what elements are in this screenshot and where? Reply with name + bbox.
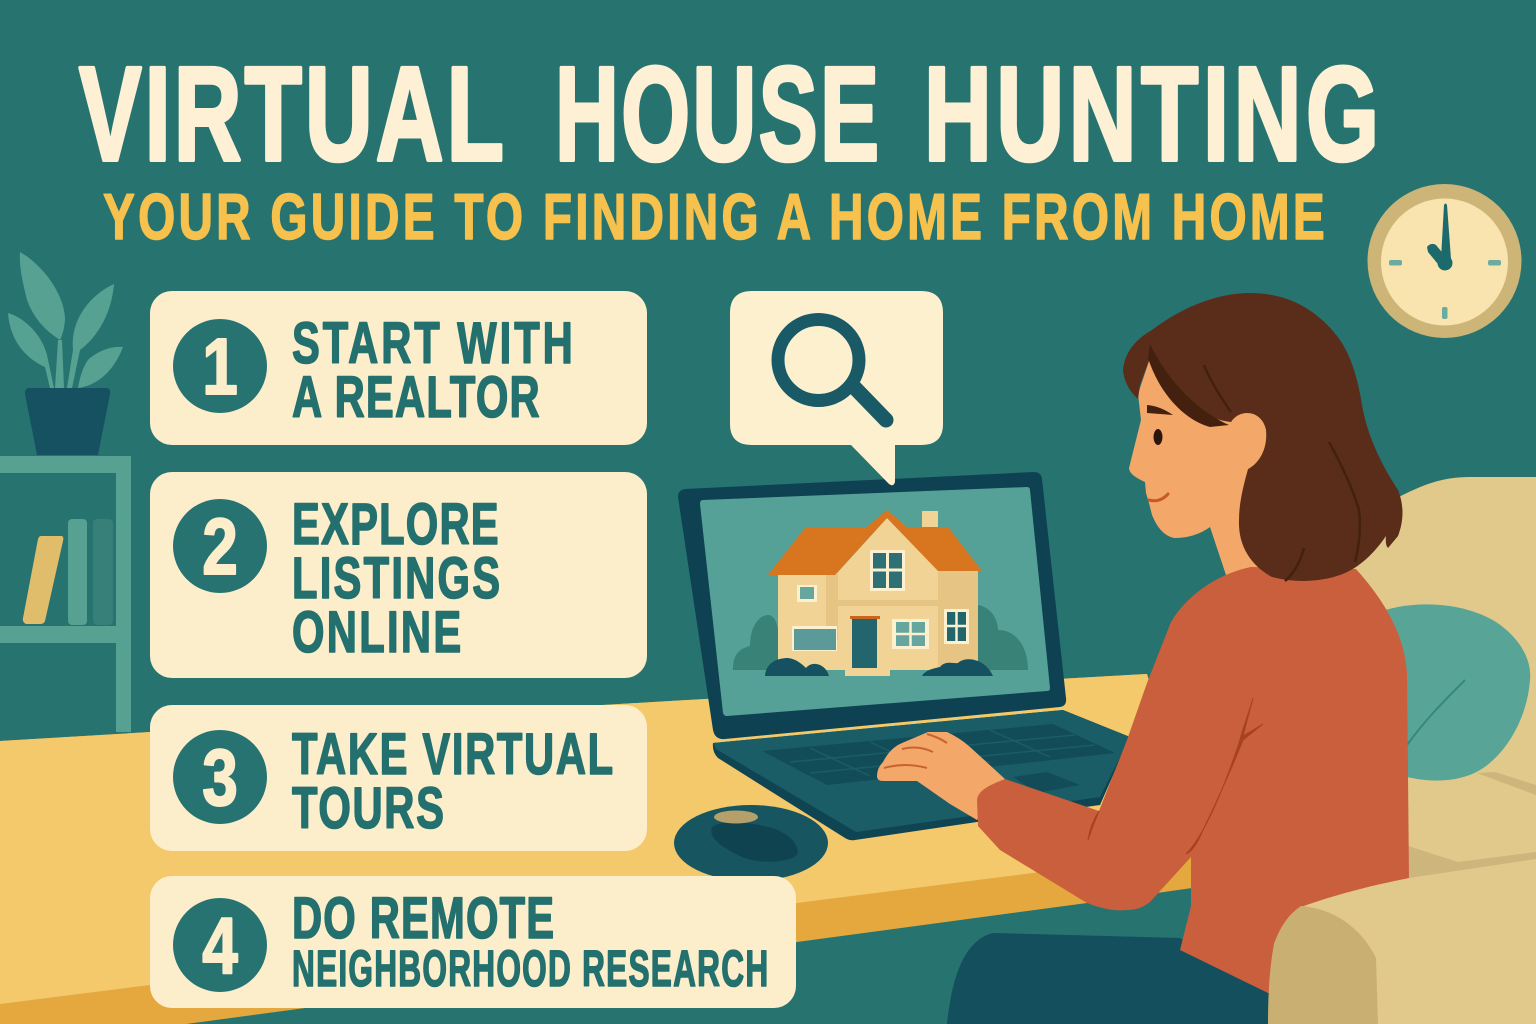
- number badge 4: 4: [202, 901, 238, 991]
- number badge 2: 2: [202, 502, 238, 592]
- title: [79, 38, 1379, 190]
- bushes: [765, 658, 993, 676]
- ear: [1231, 413, 1266, 470]
- eye and brow: [1154, 429, 1162, 445]
- armchair back and pillow: [1345, 477, 1536, 885]
- laptop: [678, 472, 1130, 840]
- step 4 text: [292, 885, 768, 997]
- books: [23, 519, 113, 625]
- face and neck: [1129, 350, 1270, 575]
- sweater: [977, 567, 1420, 993]
- icon: magnifying glass: [778, 320, 886, 420]
- step 1 text: [292, 310, 573, 430]
- speech bubble with magnifying glass: [730, 291, 943, 485]
- panel: step 4: [150, 876, 796, 1008]
- step 3 text: TOURS: [292, 775, 444, 841]
- number badge 2: [173, 499, 267, 593]
- title: HUNTING: [924, 38, 1379, 189]
- panel: step 1: [150, 291, 647, 445]
- title: HOUSE: [555, 40, 879, 190]
- woman: [877, 293, 1420, 1024]
- roof: [922, 511, 938, 528]
- hair: [1123, 293, 1402, 581]
- step 1 text: START WITH: [292, 310, 573, 376]
- house on screen: [733, 510, 1028, 676]
- panel: step 2: [150, 472, 647, 678]
- pillow: [1385, 604, 1530, 781]
- subtitle: YOUR GUIDE TO FINDING A HOME FROM HOME: [103, 182, 1325, 254]
- keyboard: [762, 724, 1115, 785]
- number badge 3: 3: [202, 733, 238, 823]
- pants: [947, 933, 1270, 1024]
- step 4 text: NEIGHBORHOOD RESEARCH: [292, 940, 768, 997]
- hand: [877, 732, 1005, 820]
- bookshelf: [0, 456, 131, 732]
- house walls: [778, 518, 978, 670]
- laptop lid: [678, 472, 1066, 739]
- windows and door: [870, 550, 905, 591]
- icon: wall clock: [1368, 184, 1522, 338]
- laptop base: [713, 710, 1130, 840]
- step 2 text: [292, 491, 500, 665]
- laptop screen: [700, 487, 1050, 716]
- step 2 text: ONLINE: [292, 599, 461, 665]
- panel: step 3: [150, 705, 647, 851]
- step 1 text: A REALTOR: [292, 364, 540, 430]
- step 2 text: LISTINGS: [292, 545, 500, 611]
- title: VIRTUAL: [79, 38, 504, 189]
- armchair armrest: [1268, 859, 1536, 1024]
- number badge 3: [173, 730, 267, 824]
- flower pot: [25, 388, 110, 455]
- number badge 1: [173, 319, 267, 413]
- plant on shelf: [8, 252, 123, 455]
- smile: [1149, 494, 1168, 501]
- step 4 text: DO REMOTE: [292, 885, 554, 951]
- desk: [0, 674, 1200, 1024]
- number badge 4: [173, 898, 267, 992]
- number badge 1: 1: [202, 322, 238, 412]
- step 3 text: [292, 721, 613, 841]
- trees: [733, 605, 1028, 670]
- mouse pad and mouse: [674, 805, 828, 881]
- step 3 text: TAKE VIRTUAL: [292, 721, 613, 787]
- icon: plant leaves: [8, 252, 123, 388]
- step 2 text: EXPLORE: [292, 491, 499, 557]
